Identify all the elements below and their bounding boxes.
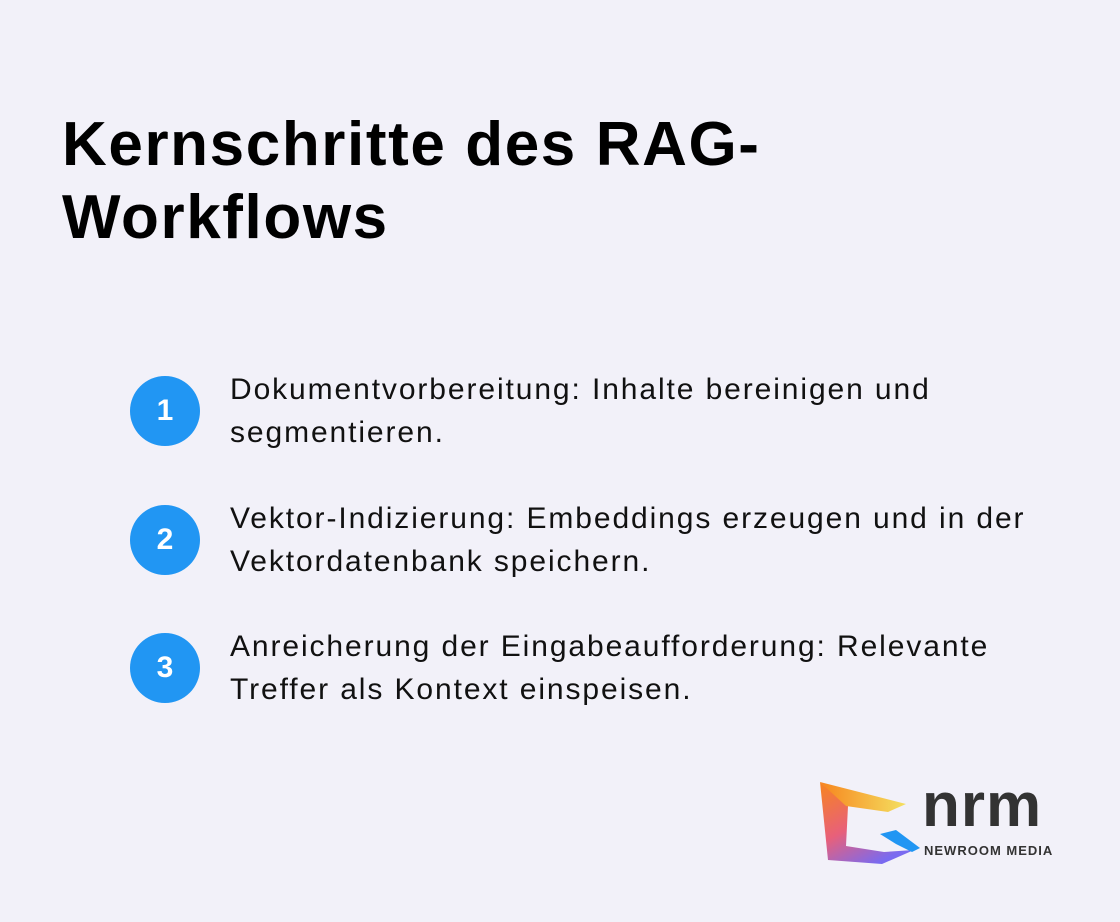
step 2: 2: [157, 523, 173, 556]
step 1: Dokumentvorbereitung: Inhalte bereinigen und: [230, 373, 931, 406]
step 2: Vektor-Indizierung: Embeddings erzeugen und in der: [230, 502, 1025, 535]
step 2: Vektordatenbank speichern.: [230, 545, 651, 578]
step 3: [130, 630, 989, 706]
title: Kernschritte des RAG-: [62, 110, 761, 179]
title: Workflows: [62, 183, 389, 252]
logo: NEWROOM MEDIA: [924, 843, 1053, 858]
step 2: [130, 502, 1025, 578]
step 1: [130, 373, 931, 449]
logo: [820, 771, 1053, 864]
step 3: Anreicherung der Eingabeaufforderung: Relevante: [230, 630, 989, 663]
step 1: 1: [157, 394, 173, 427]
title: [62, 110, 761, 252]
step 1: segmentieren.: [230, 416, 445, 449]
step 3: 3: [157, 651, 173, 684]
logo: nrm: [922, 771, 1042, 840]
step 3: Treffer als Kontext einspeisen.: [230, 673, 692, 706]
